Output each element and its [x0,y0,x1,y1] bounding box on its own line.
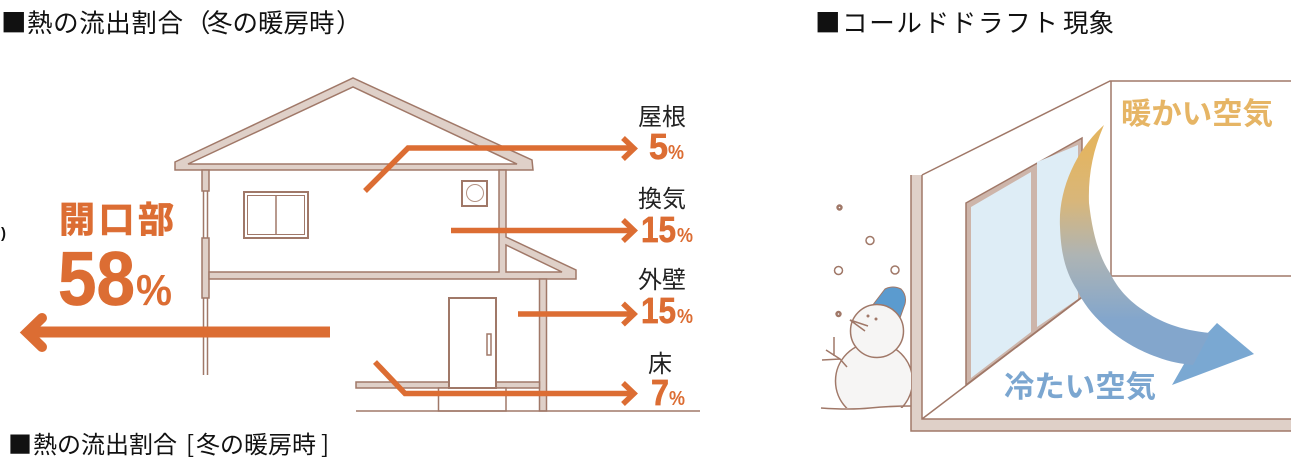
caption: heat loss ratio: 冬の暖房時 [196,425,316,460]
room perspective lines [911,81,1291,431]
face [850,320,868,331]
arrow: outer wall [518,304,634,324]
value: ventilation 15%: % [677,225,693,247]
value: roof 5% [649,126,684,167]
heading: cold draft: ■ [815,3,841,40]
heading: heat loss ratio: ■ [1,3,27,40]
twig arm [822,337,847,367]
arrow: openings [27,318,330,347]
value: floor 7%: % [669,388,685,410]
left pane [971,172,1031,378]
label: roof: 屋根 [638,104,686,131]
heading: heat loss ratio: 冬の暖房時 [207,3,335,40]
value: outer wall 15%: 15 [641,290,676,331]
value: roof 5%: % [668,142,684,164]
window frame [966,138,1082,385]
lower right wall [540,279,546,411]
heading: heat loss ratio: 熱の流出割合 [27,3,184,40]
arrow head [1172,323,1254,385]
main roof [175,78,533,170]
caption: heat loss ratio: 熱の流出割合 [33,425,177,460]
value: openings 58%: % [136,266,172,315]
arrow: ventilation [451,220,634,241]
second floor band and lower roof [209,170,576,279]
snowman [821,287,912,420]
label: warm air: 暖かい空気 [1121,98,1273,131]
wall cross section [911,175,1291,431]
house section drawing [175,78,700,411]
value: openings 58%: 58 [58,237,135,322]
value: outer wall 15%: % [677,306,693,328]
label: openings: 開口部 [59,199,174,240]
label: outer wall: 外壁 [638,267,686,294]
window [244,192,308,238]
body [834,346,911,408]
left wall [202,170,209,375]
room interior [911,81,1291,431]
arrow: floor [375,362,634,404]
right pane [1037,145,1078,327]
entrance step [438,388,506,411]
label: floor: 床 [648,351,672,378]
value: ventilation 15%: 15 [641,209,676,250]
curved gradient body [1060,125,1210,365]
ventilation fan [462,181,487,206]
door [449,298,496,388]
ground [821,406,911,409]
heading: heat loss ratio: （ [185,3,211,40]
air flow arrow [1060,125,1254,385]
caption: heat loss ratio: ] [321,425,329,460]
label: ventilation: 換気 [638,186,686,213]
caption: heat loss ratio: ■ [8,425,32,460]
value: floor 7% [651,372,685,413]
heading: cold draft: コールドドラフト [842,3,1060,40]
eyes [866,314,878,320]
caption: heat loss ratio: [ [186,425,194,460]
stray mark: ) [1,225,6,242]
value: roof 5%: 5 [649,126,668,167]
label: cold air: 冷たい空気 [1004,371,1156,404]
arrow: roof [365,138,634,191]
window with two panes [966,138,1082,385]
heading: heat loss ratio: ） [336,3,362,40]
snowflakes [834,206,899,316]
hat [872,287,906,318]
head [850,304,904,358]
value: floor 7%: 7 [651,372,669,413]
ground line [356,410,700,412]
ground floor band [356,382,540,388]
heading: cold draft: 現象 [1063,3,1114,40]
